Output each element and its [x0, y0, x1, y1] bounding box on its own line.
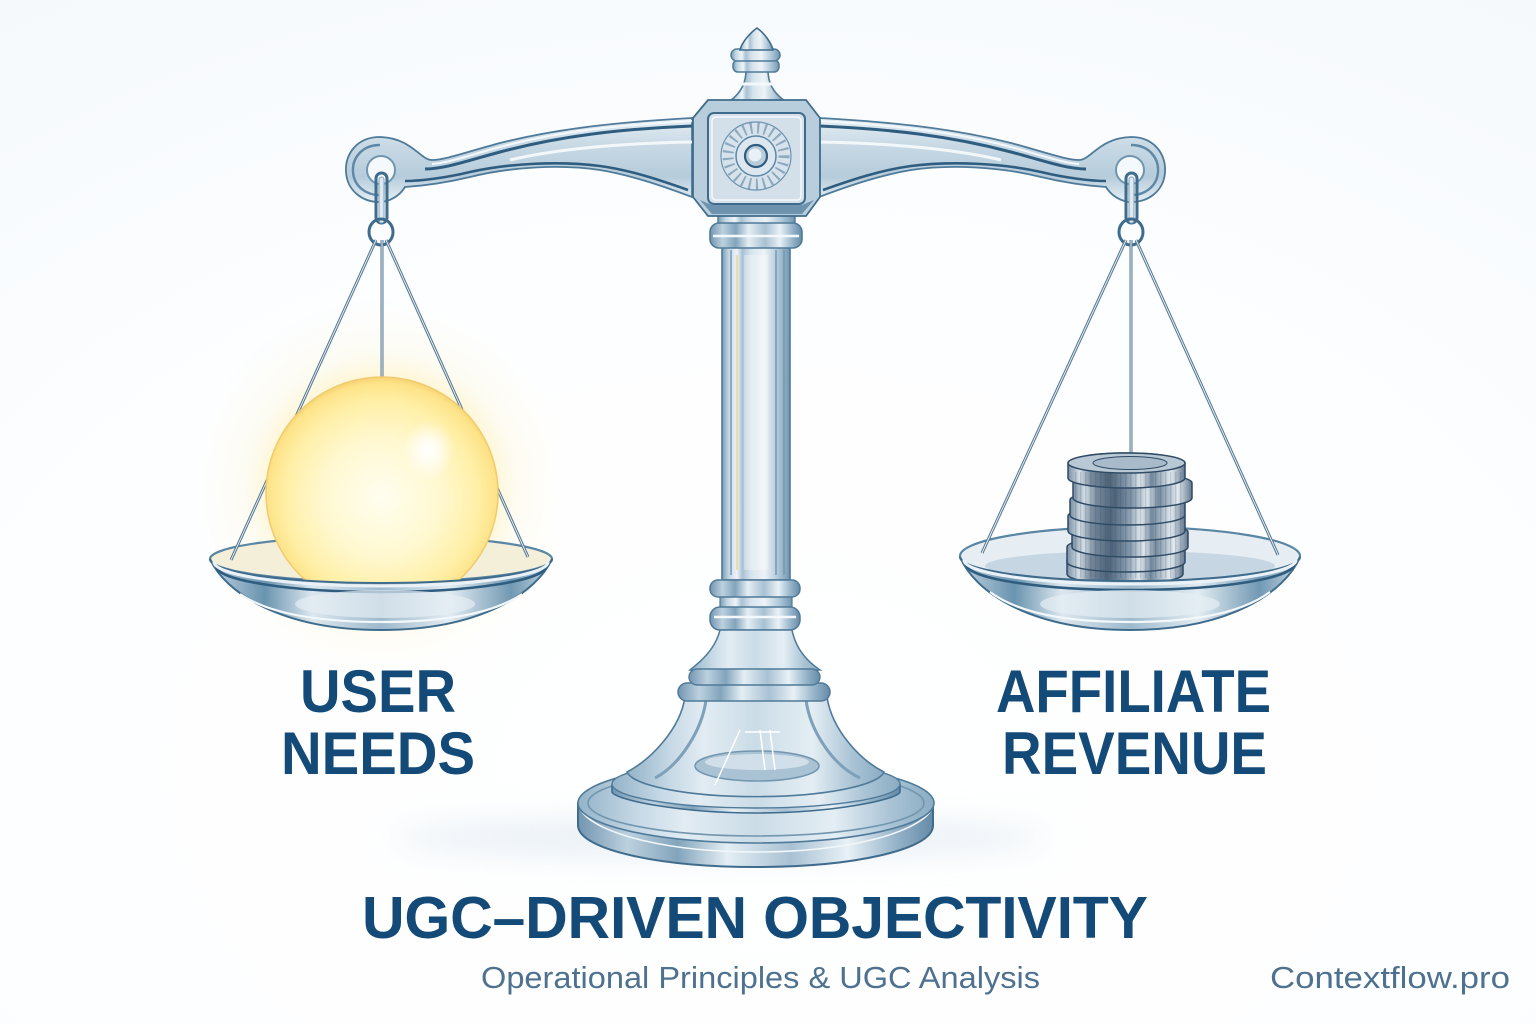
right pan strings [982, 240, 1278, 555]
bell pedestal [627, 630, 884, 797]
label: affiliate revenue [996, 658, 1271, 787]
title: UGC–DRIVEN OBJECTIVITY [362, 885, 1148, 951]
pivot block with rosette [693, 100, 820, 216]
glowing sphere: user needs [266, 377, 498, 609]
label: affiliate revenue: REVENUE [1002, 720, 1267, 787]
right pan with coins [960, 240, 1300, 630]
central column [710, 214, 802, 580]
left pan strings [231, 240, 528, 560]
label: affiliate revenue: AFFILIATE [996, 658, 1271, 725]
balance scale illustration [192, 28, 1300, 867]
subtitle: Operational Principles & UGC Analysis [481, 960, 1040, 995]
stem rings [710, 580, 800, 630]
scale beam [346, 118, 1165, 202]
brand credit: Contextflow.pro [1270, 960, 1510, 995]
right pan bowl [960, 557, 1300, 630]
label: user needs: NEEDS [281, 720, 475, 787]
stepped base [578, 760, 934, 867]
sphere glow [192, 300, 572, 680]
finial [730, 28, 785, 101]
left pan bowl [210, 559, 552, 630]
left pan hanger [369, 173, 393, 245]
ground shadow [390, 820, 1050, 856]
right pan interior [960, 527, 1300, 585]
left pan with sphere [192, 240, 572, 680]
label: user needs: USER [300, 658, 456, 725]
left pan interior [210, 536, 552, 582]
label: user needs [281, 658, 475, 787]
coin stack: affiliate revenue [1067, 453, 1192, 584]
right pan hanger [1119, 173, 1143, 245]
